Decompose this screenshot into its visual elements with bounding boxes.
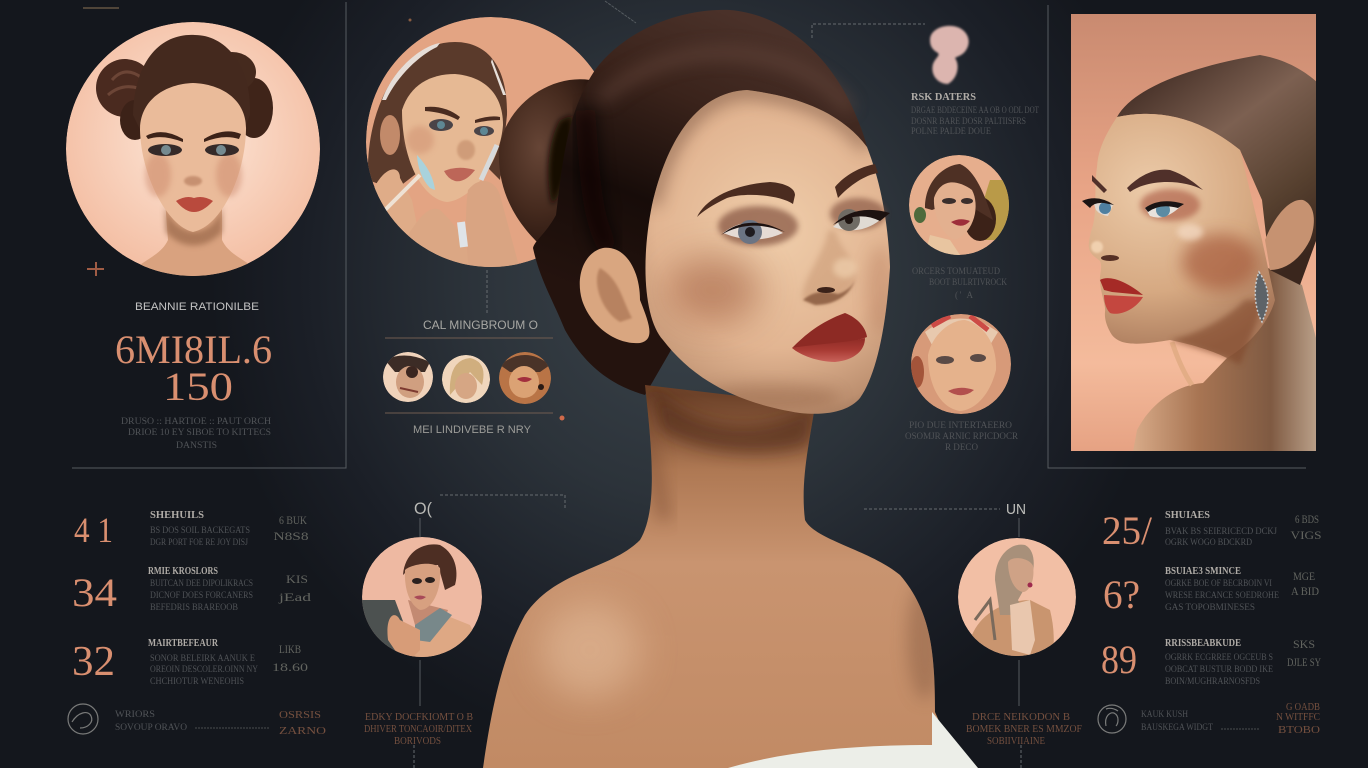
thumbnail 2 (442, 355, 490, 403)
stat row: OGRKE BOE OF BECRBOIN VI (1165, 578, 1272, 588)
stat row: MAIRTBEFEAUR (148, 638, 219, 649)
stat row: BOIN/MUGHRARNOSFDS (1165, 676, 1260, 686)
back hair (533, 10, 868, 395)
stat row (1101, 637, 1321, 686)
caption: circle two: R DECO (945, 442, 978, 452)
stat row: WRESE ERCANCE SOEDROHE (1165, 590, 1279, 600)
stat row (1102, 508, 1322, 553)
icon: face badge (1098, 705, 1126, 733)
text block: top right column (911, 92, 1039, 136)
stat caption: DANSTIS (176, 440, 217, 450)
caption (364, 712, 473, 747)
stat row: SHUIAES (1165, 510, 1210, 521)
circle: callout right (958, 501, 1082, 747)
stat list: right (1098, 508, 1322, 736)
label: O( (414, 499, 432, 518)
stat row: 6? (1103, 572, 1140, 617)
eyes (1140, 189, 1200, 221)
footer row (115, 709, 326, 737)
text block: top right column: DRGAE BDDECEINE AA OB O ODL DOT (911, 105, 1039, 115)
icon: face badge (68, 704, 98, 734)
caption: SOBIIVIIAINE (987, 736, 1045, 747)
portrait (958, 538, 1076, 665)
icon: plus mark (87, 262, 104, 276)
footer row: N WITFFC (1276, 712, 1320, 723)
stat row: GAS TOPOBMINESES (1165, 602, 1255, 612)
stat row: BVAK BS SEIERICECD DCKJ (1165, 526, 1277, 536)
stat row: CHCHIOTUR WENEOHIS (150, 676, 244, 686)
stat row: DJLE SY (1287, 655, 1321, 669)
hair (1117, 55, 1320, 285)
footer row: BAUSKEGA WIDGT (1141, 722, 1213, 732)
eyes (718, 206, 798, 246)
portrait (362, 537, 482, 657)
lips (792, 313, 867, 348)
caption: EDKY DOCFKIOMT O B (365, 712, 473, 723)
nose (833, 258, 857, 278)
stat row: DICNOF DOES FORCANERS (150, 590, 253, 600)
caption: circle two: PIO DUE INTERTAEERO (909, 420, 1013, 430)
ear (1265, 200, 1314, 270)
stat label: BEANNIE RATIONILBE (135, 301, 259, 313)
face (1089, 114, 1275, 358)
panel: profile portrait (1071, 14, 1320, 452)
text block: top right column: POLNE PALDE DOUE (911, 126, 991, 136)
caption: circle one: (' A (955, 290, 974, 300)
main figure: woman (483, 10, 978, 768)
stat row: 25/ (1102, 508, 1153, 553)
stat row (74, 510, 308, 550)
dress (728, 712, 978, 768)
stat row: jEad (278, 590, 311, 604)
stat caption: DRUSO :: HARTIOE :: PAUT ORCH (121, 416, 272, 426)
stat row: OGRK WOGO BDCKRD (1165, 537, 1252, 547)
portrait: small circle woman with headband (910, 314, 1011, 414)
bun (499, 79, 600, 242)
stat row: SONOR BELEIRK AANUK E (150, 653, 255, 663)
stat row: 18.60 (272, 660, 308, 674)
eyebrows (697, 182, 795, 217)
stat row: VIGS (1290, 528, 1322, 542)
caption: BORIVODS (394, 736, 441, 747)
caption: DHIVER TONCAOIR/DITEX (364, 724, 473, 735)
stat row: BEFEDRIS BRAREOOB (150, 602, 238, 612)
stat row: BSUIAE3 SMINCE (1165, 566, 1241, 577)
big stat number: 150 (163, 364, 233, 409)
footer row: BTOBO (1278, 725, 1320, 736)
dot accent (408, 18, 412, 22)
caption: circle two (905, 420, 1018, 452)
caption: circle one: BOOT BULRTIVROCK (929, 277, 1007, 287)
stat row: RRISSBEABKUDE (1165, 638, 1241, 649)
stat row: A BID (1291, 584, 1319, 598)
caption: circle one: ORCERS TOMUATEUD (912, 266, 1000, 276)
stat row: OGRRK ECGRREE OGCEUB S (1165, 652, 1273, 662)
caption: circle two: OSOMJR ARNIC RPICDOCR (905, 431, 1018, 441)
stat row: OOBCAT BUSTUR BODD IKE (1165, 664, 1273, 674)
caption: MEI LINDIVEBE R NRY (413, 424, 532, 436)
caption: circle one (912, 266, 1007, 300)
footer row: G OADB (1286, 702, 1320, 713)
stat row (1103, 566, 1319, 617)
stat row: KIS (286, 572, 308, 586)
stat row: OREOIN DESCOLER.OINN NY (150, 664, 258, 674)
stat row (72, 566, 311, 615)
portrait: top-left woman with hair buns (66, 22, 320, 280)
stat row: SKS (1293, 637, 1315, 651)
stat row: RMIE KROSLORS (148, 566, 218, 577)
stat row (72, 638, 308, 686)
text block: top right column: RSK DATERS (911, 92, 976, 103)
label: UN (1006, 501, 1026, 518)
footer row: WRIORS (115, 709, 155, 719)
stat list: left (68, 510, 326, 737)
earring (1255, 272, 1268, 322)
stat row: BS DOS SOIL BACKEGATS (150, 525, 250, 535)
panel: main stat (115, 301, 272, 450)
stat row: N8S8 (274, 529, 308, 543)
stat row: LIKB (279, 642, 301, 656)
big stat title: 6MI8IL.6 (115, 327, 272, 372)
caption (966, 712, 1082, 747)
footer row: OSRSIS (279, 710, 321, 721)
brows (1092, 175, 1107, 193)
stat row: 6 BDS (1295, 512, 1319, 526)
stat caption: DRIOE 10 EY SIBOE TO KITTECS (128, 427, 271, 437)
nose shadow and lips (1091, 241, 1103, 253)
footer row: KAUK KUSH (1141, 709, 1188, 719)
stat row: 6 BUK (279, 513, 307, 527)
caption: DRCE NEIKODON B (972, 712, 1070, 723)
stat caption (121, 416, 272, 450)
stat row: 32 (72, 639, 115, 685)
circle: callout left (360, 499, 482, 747)
heading: CAL MINGBROUM O (423, 318, 538, 332)
neck and shoulders (483, 385, 960, 768)
portrait: small circle woman with leaves (909, 155, 1010, 255)
stat row: 4 1 (74, 510, 113, 550)
caption: BOMEK BNER ES MMZOF (966, 724, 1082, 735)
thumbnail 3 (499, 352, 551, 404)
stat row: 34 (72, 570, 117, 615)
portrait: woman applying skincare rollers (366, 17, 594, 267)
stat row: MGE (1293, 569, 1315, 583)
icon: cosmetic droplets (930, 26, 969, 84)
footer row (1141, 702, 1320, 736)
ear (580, 248, 649, 343)
dot accent (560, 416, 564, 420)
shoulder (1133, 265, 1320, 452)
thumbnail 1 (383, 352, 433, 402)
text block: top right column: DOSNR BARE DOSR PALTIISFRS (911, 116, 1026, 126)
stat row: DGR PORT FOE RE JOY DISJ (150, 537, 248, 547)
section: product comparison (383, 318, 564, 436)
footer row: ZARNO (279, 726, 326, 737)
stat row: SHEHUILS (150, 510, 204, 521)
face (645, 90, 890, 414)
stat row: BUITCAN DEE DIPOLIKRACS (150, 578, 253, 588)
footer row: SOVOUP ORAVO (115, 722, 188, 732)
stat row: 89 (1101, 637, 1137, 682)
